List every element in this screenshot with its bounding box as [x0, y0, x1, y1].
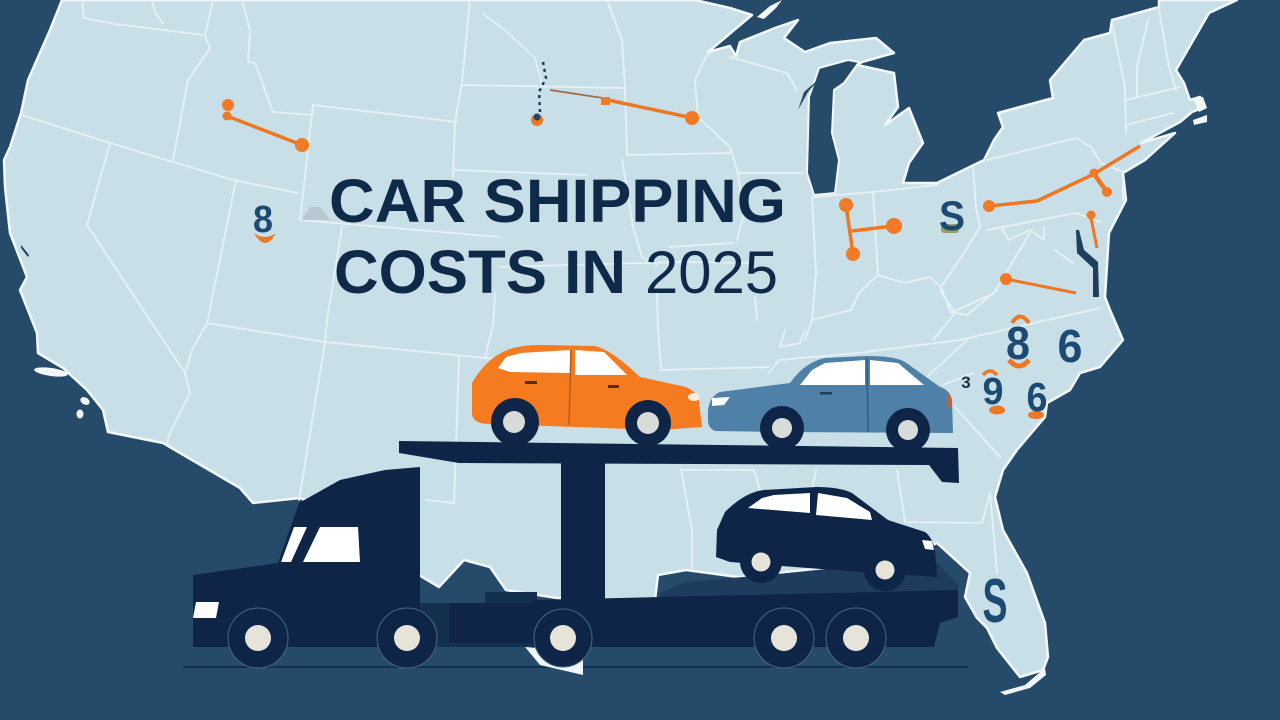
California islands — [34, 366, 91, 418]
title backdrop shape near Wyoming — [302, 207, 330, 220]
truck cab — [193, 467, 420, 647]
Florida Keys — [1000, 668, 1046, 695]
title line 2: COSTS IN — [334, 238, 626, 306]
Cape Cod islands — [1193, 97, 1207, 112]
road line — [183, 666, 968, 668]
title line 1: CAR SHIPPING — [329, 167, 786, 235]
Nantucket — [1193, 115, 1207, 125]
Lake Michigan — [807, 60, 859, 195]
support column — [561, 460, 605, 602]
Texas tip — [525, 647, 583, 675]
title year: 2025 — [645, 239, 778, 306]
dollar marker: North Carolina 6: 6 — [1058, 320, 1082, 372]
route: Virginia segment — [1000, 273, 1076, 293]
dollar marker: Utah: 8 — [253, 199, 273, 241]
fifth wheel block — [485, 592, 537, 604]
chassis — [420, 603, 532, 647]
route lines — [222, 90, 1140, 293]
windshield — [281, 527, 307, 562]
lower trailer deck — [532, 590, 958, 647]
dollar marker: Carolina coast 6: 6 — [1026, 374, 1048, 420]
route: Delaware segment — [1086, 210, 1097, 248]
cab frame — [449, 603, 533, 643]
dollar marker: Florida: S — [982, 567, 1008, 636]
ramp under lower car — [660, 560, 958, 600]
car carrier truck — [183, 441, 968, 675]
route: Pennsylvania to Connecticut — [983, 146, 1140, 212]
orange car — [472, 345, 702, 446]
state borders — [22, 0, 1180, 573]
dollar marker: South Carolina 9: 9 — [982, 371, 1004, 413]
headlight — [193, 602, 219, 618]
San Francisco bay — [21, 245, 29, 257]
upper deck — [399, 441, 959, 483]
route: Indiana junction — [839, 198, 902, 261]
route: South Dakota to Minnesota — [550, 90, 699, 125]
dollar marker: Virginia 8: 8 — [1006, 317, 1030, 369]
dollar marker: small 3: 3 — [961, 373, 971, 392]
Green Bay — [798, 79, 819, 110]
Isle Royale — [757, 0, 782, 19]
title — [329, 167, 786, 306]
blue car — [708, 356, 953, 452]
Chesapeake Bay — [1076, 230, 1099, 297]
route: Idaho to Wyoming — [222, 99, 309, 152]
black lower car — [716, 487, 937, 591]
route dotted marker in South Dakota — [531, 62, 546, 126]
side window — [303, 527, 360, 562]
dollar marker: Ohio: S — [939, 192, 965, 239]
truck wheels — [228, 608, 886, 668]
